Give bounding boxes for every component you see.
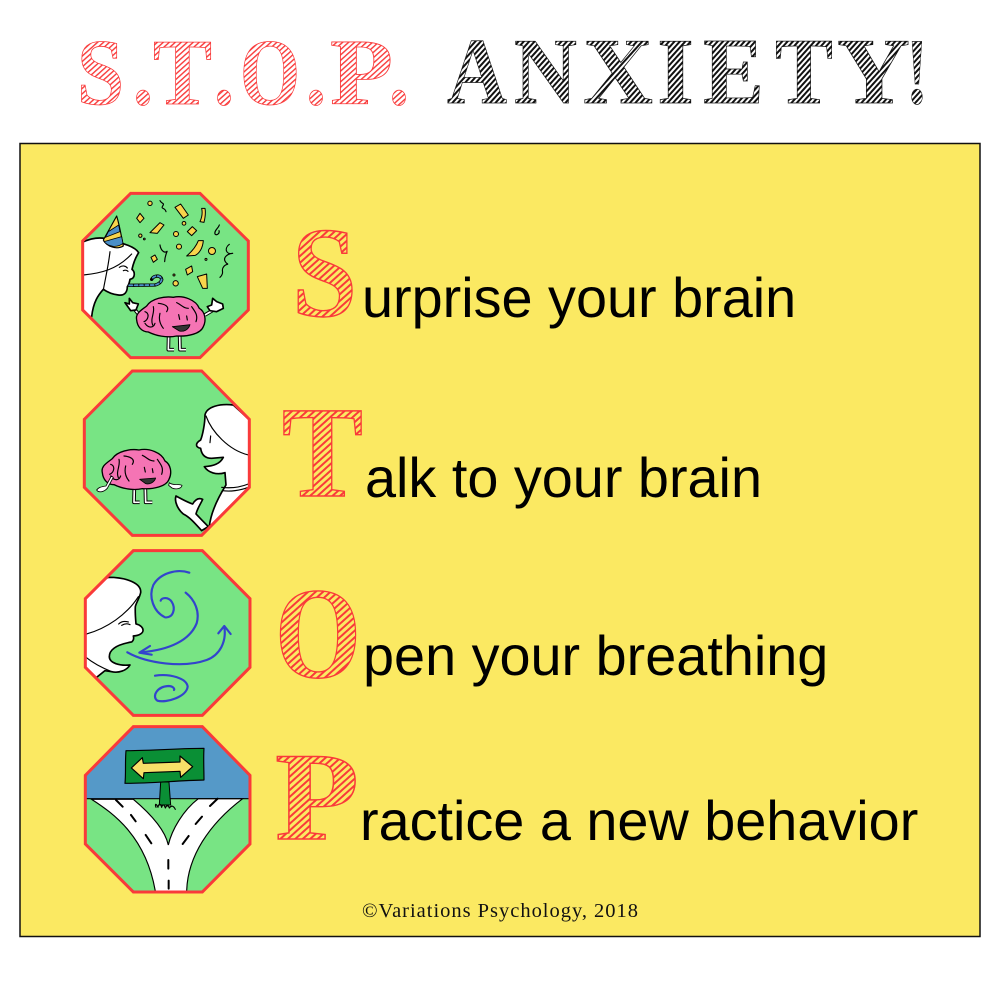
brain character [102, 449, 171, 502]
icon: open breathing [80, 551, 250, 715]
title word: S.T.O.P.: O [240, 21, 300, 125]
step T: Talk to your brain: alk to your brain [365, 446, 762, 509]
title word: ANXIETY!: E [703, 20, 764, 124]
title word: ANXIETY!: N [514, 20, 577, 124]
title word: S.T.O.P.: . [389, 21, 409, 125]
step P: Practice a new behavior [275, 728, 918, 867]
step T: Talk to your brain: T [282, 381, 363, 525]
step T: Talk to your brain [282, 381, 762, 525]
title word: S.T.O.P.: T [153, 21, 212, 125]
brain character [125, 297, 223, 350]
person details [206, 416, 248, 491]
exhaling head [80, 577, 143, 677]
title word: ANXIETY!: I [657, 20, 694, 124]
title word: S.T.O.P.: P [330, 21, 393, 125]
step O: Open your breathing: O [275, 562, 361, 706]
title word: S.T.O.P.: . [306, 21, 326, 125]
breath swirls [127, 571, 231, 701]
person facing brain [197, 405, 253, 527]
step P: Practice a new behavior: ractice a new behavior [360, 789, 918, 852]
step P: Practice a new behavior: P [275, 728, 359, 867]
title word: S.T.O.P. [77, 21, 409, 125]
forked road [92, 799, 243, 893]
hand [175, 496, 208, 531]
road sign [125, 748, 204, 783]
title word: S.T.O.P.: . [214, 21, 234, 125]
title word: ANXIETY!: ! [906, 20, 928, 124]
title word: ANXIETY!: T [775, 20, 833, 124]
icon: surprise, party blower and brain [80, 193, 248, 358]
title word: ANXIETY! [447, 20, 928, 124]
confetti [137, 201, 233, 288]
step S: Surprise your brain: S [292, 202, 357, 344]
step O: Open your breathing: pen your breathing [363, 624, 828, 687]
copyright footer: ©Variations Psychology, 2018 [362, 900, 638, 922]
step O: Open your breathing [275, 562, 828, 706]
title word: ANXIETY!: Y [837, 20, 910, 124]
title word: ANXIETY!: X [583, 20, 653, 124]
title word: ANXIETY!: A [447, 20, 507, 124]
step S: Surprise your brain [292, 202, 796, 344]
panel: yellow background [20, 144, 980, 936]
signpost [159, 782, 171, 805]
icon: fork in the road with sign [83, 725, 253, 895]
title word: S.T.O.P.: . [133, 21, 153, 125]
double arrow [131, 756, 193, 779]
step S: Surprise your brain: urprise your brain [362, 266, 796, 329]
title word: S.T.O.P.: S [77, 21, 124, 125]
title [77, 20, 928, 125]
icon: talking to brain [84, 371, 253, 535]
brain arms [97, 476, 182, 492]
